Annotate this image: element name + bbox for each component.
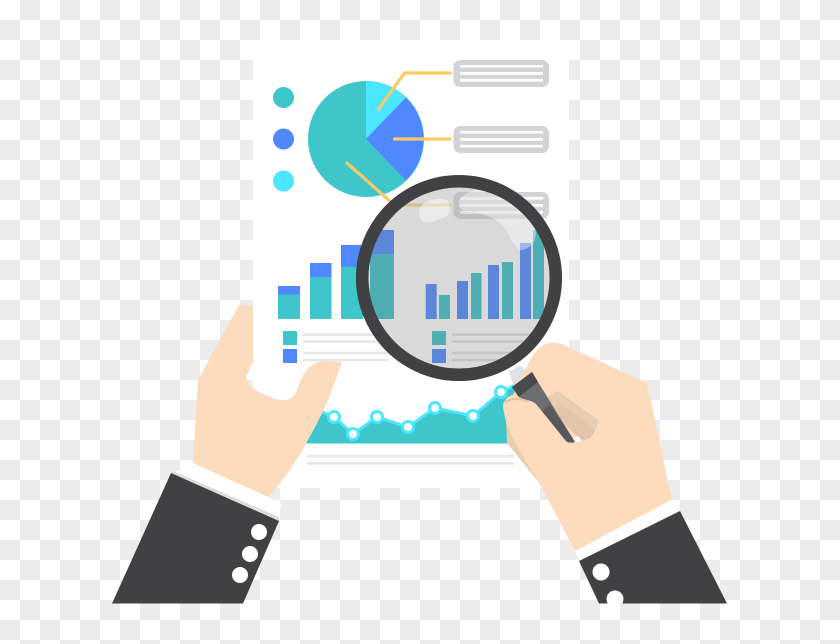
lens highlights [419,199,450,223]
sleeve [112,473,279,604]
callout lines [347,73,450,203]
line chart [306,385,515,444]
callout label 2 [454,126,549,153]
finger crease [505,399,528,402]
callout label 1 [454,60,549,87]
pie chart [308,81,424,197]
cuff shadow [171,471,279,521]
cuff [171,463,281,521]
legend left [283,331,389,363]
panel: report paper [253,40,569,488]
lens ring [362,181,556,375]
left hand [112,305,342,604]
legend dots [273,87,294,192]
magnifying glass [360,180,560,390]
cuff [575,500,680,561]
stacked bar chart [278,245,363,319]
white gap at handle tip [566,436,582,442]
callout label 3 [454,192,549,219]
hand shadow [543,391,598,441]
sleeve [579,511,727,608]
lens content [368,188,550,368]
handle grip [512,372,575,443]
hand [503,343,672,551]
handle neck [509,365,532,390]
right hand [503,343,727,608]
caption lines [307,455,514,465]
shadow finger [506,420,548,484]
buttons [232,524,267,583]
